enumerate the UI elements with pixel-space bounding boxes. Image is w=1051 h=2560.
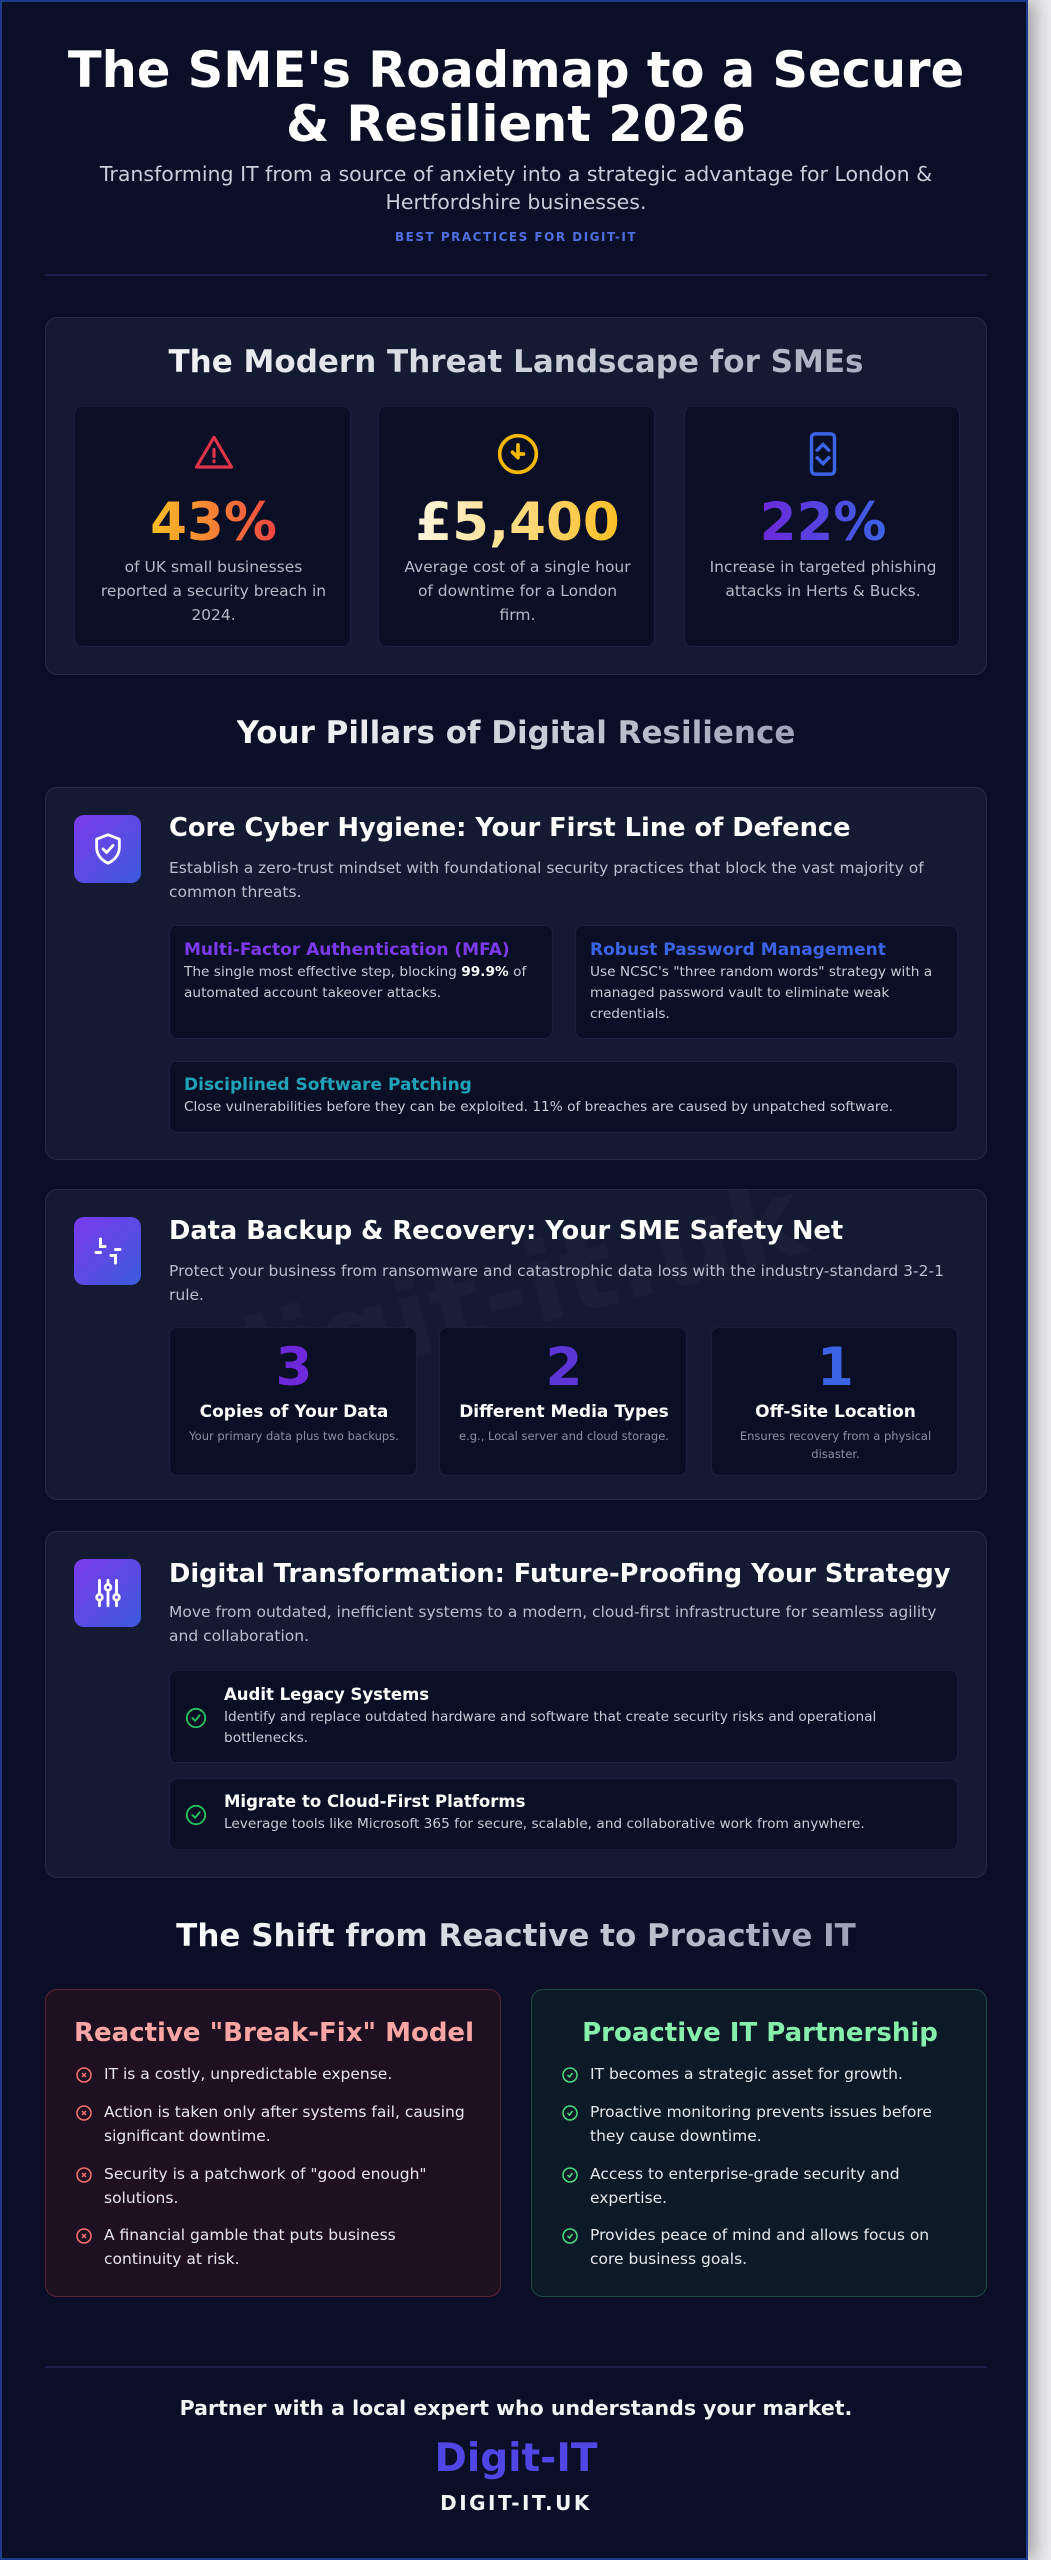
- card: password: [575, 925, 958, 1039]
- card: 3 copies: [169, 1327, 417, 1476]
- card: patching: Close vulnerabilities before they can be exploited. 11% of breaches are caused by unpatched software.: [184, 1099, 893, 1115]
- card: 1 off-site: Off-Site Location: [755, 1402, 916, 1422]
- heading: pillars: Your Pillars of Digital Resilience: [237, 715, 795, 751]
- footer url: DIGIT-IT.UK: [440, 2491, 592, 2515]
- description: Move from outdated, inefficient systems to a modern, cloud-first infrastructure for seamless agility and collaboration.: [169, 1603, 936, 1645]
- item: cloud: Migrate to Cloud-First Platforms: [224, 1792, 525, 1811]
- card: MFA: The single most effective step, blocking 99.9% of automated account takeover attacks.: [184, 964, 526, 1001]
- card: 2 media: Different Media Types: [459, 1402, 669, 1422]
- card: 3 copies: Copies of Your Data: [200, 1402, 388, 1422]
- panel: reactive: [45, 1989, 501, 2297]
- title: The SME's Roadmap to a Secure: [68, 41, 964, 99]
- card: 3 copies: Your primary data plus two backups.: [189, 1429, 399, 1443]
- icon: shield: [74, 815, 141, 883]
- card: patching: Disciplined Software Patching: [184, 1075, 472, 1095]
- title: [68, 41, 964, 153]
- panel: threat landscape: [45, 317, 987, 675]
- icon: warning: [194, 436, 234, 469]
- subtitle: Transforming IT from a source of anxiety into a strategic advantage for London & Hertfordshire businesses.: [100, 162, 932, 214]
- footer tagline: Partner with a local expert who understands your market.: [180, 2396, 852, 2420]
- footer logo: Digit-IT: [434, 2436, 597, 2481]
- stat card: 22%: [684, 406, 960, 647]
- icon: clock: [498, 434, 538, 474]
- panel: proactive: IT becomes a strategic asset for growth.: [590, 2065, 903, 2083]
- panel: proactive: Provides peace of mind and allows focus on core business goals.: [590, 2226, 929, 2268]
- heading: shift: The Shift from Reactive to Proactive IT: [176, 1918, 856, 1954]
- heading: Reactive "Break-Fix" Model: [74, 2018, 474, 2048]
- panel: digital transformation: [45, 1531, 987, 1878]
- item: cloud: [169, 1778, 958, 1850]
- panel: reactive: Action is taken only after systems fail, causing significant downtime.: [104, 2103, 465, 2145]
- icon: phone: [810, 432, 836, 476]
- title: Digital Transformation: Future-Proofing Your Strategy: [169, 1559, 951, 1589]
- heading: threat landscape: [46, 342, 986, 382]
- card: MFA: [169, 925, 553, 1039]
- heading: threat landscape: The Modern Threat Landscape for SMEs: [169, 344, 863, 380]
- card: 1 off-site: Ensures recovery from a physical disaster.: [740, 1429, 931, 1461]
- icon: sliders: [74, 1559, 141, 1627]
- number: 22%: 22%: [760, 492, 886, 553]
- item: audit: [169, 1670, 958, 1763]
- icon: recovery: [74, 1217, 141, 1285]
- text: of UK small businesses reported a security breach in 2024.: [101, 558, 326, 624]
- description: Protect your business from ransomware and catastrophic data loss with the industry-standard 3-2-1 rule.: [169, 1262, 944, 1304]
- text: Average cost of a single hour of downtime for a London firm.: [404, 558, 631, 624]
- list: [104, 2065, 465, 2268]
- stat card: £5,400: [378, 406, 655, 647]
- tagline: BEST PRACTICES FOR DIGIT-IT: [395, 230, 637, 244]
- item: cloud: Leverage tools like Microsoft 365 for secure, scalable, and collaborative work from anywhere.: [224, 1816, 865, 1832]
- stat card: 43%: [74, 406, 351, 647]
- text: Increase in targeted phishing attacks in Herts & Bucks.: [710, 558, 936, 600]
- number: 43%: 43%: [150, 492, 277, 553]
- item: audit: Identify and replace outdated hardware and software that create security risks and operational bottlenecks.: [224, 1709, 876, 1746]
- card: 2 media: 2: [546, 1337, 582, 1398]
- card: 2 media: [439, 1327, 687, 1476]
- panel: proactive: Access to enterprise-grade security and expertise.: [590, 2165, 900, 2207]
- title: Data Backup & Recovery: Your SME Safety Net: [169, 1216, 843, 1246]
- title: Core Cyber Hygiene: Your First Line of Defence: [169, 813, 851, 843]
- panel: core cyber hygiene: [45, 787, 987, 1160]
- card: 1 off-site: [711, 1327, 958, 1476]
- description: Establish a zero-trust mindset with foundational security practices that block the vast majority of common threats.: [169, 859, 924, 901]
- card: password: Use NCSC's "three random words" strategy with a managed password vault to eliminate weak credentials.: [590, 964, 932, 1022]
- panel: reactive: A financial gamble that puts business continuity at risk.: [104, 2226, 396, 2268]
- panel: proactive: [531, 1989, 987, 2297]
- card: MFA: Multi-Factor Authentication (MFA): [184, 940, 510, 960]
- card: patching: [169, 1061, 958, 1133]
- heading: Proactive IT Partnership: [582, 2018, 938, 2048]
- card: 3 copies: 3: [276, 1337, 312, 1398]
- panel: proactive: Proactive monitoring prevents issues before they cause downtime.: [590, 2103, 932, 2145]
- panel: reactive: Security is a patchwork of "good enough" solutions.: [104, 2165, 427, 2207]
- panel: reactive: IT is a costly, unpredictable expense.: [104, 2065, 392, 2083]
- item: audit: Audit Legacy Systems: [224, 1685, 429, 1704]
- card: password: Robust Password Management: [590, 940, 886, 960]
- list: [590, 2065, 932, 2268]
- title: & Resilient 2026: [286, 95, 746, 153]
- panel: data backup: [45, 1189, 987, 1500]
- card: 2 media: e.g., Local server and cloud storage.: [459, 1429, 669, 1443]
- card: 1 off-site: 1: [817, 1337, 854, 1398]
- number: £5,400: £5,400: [415, 492, 620, 553]
